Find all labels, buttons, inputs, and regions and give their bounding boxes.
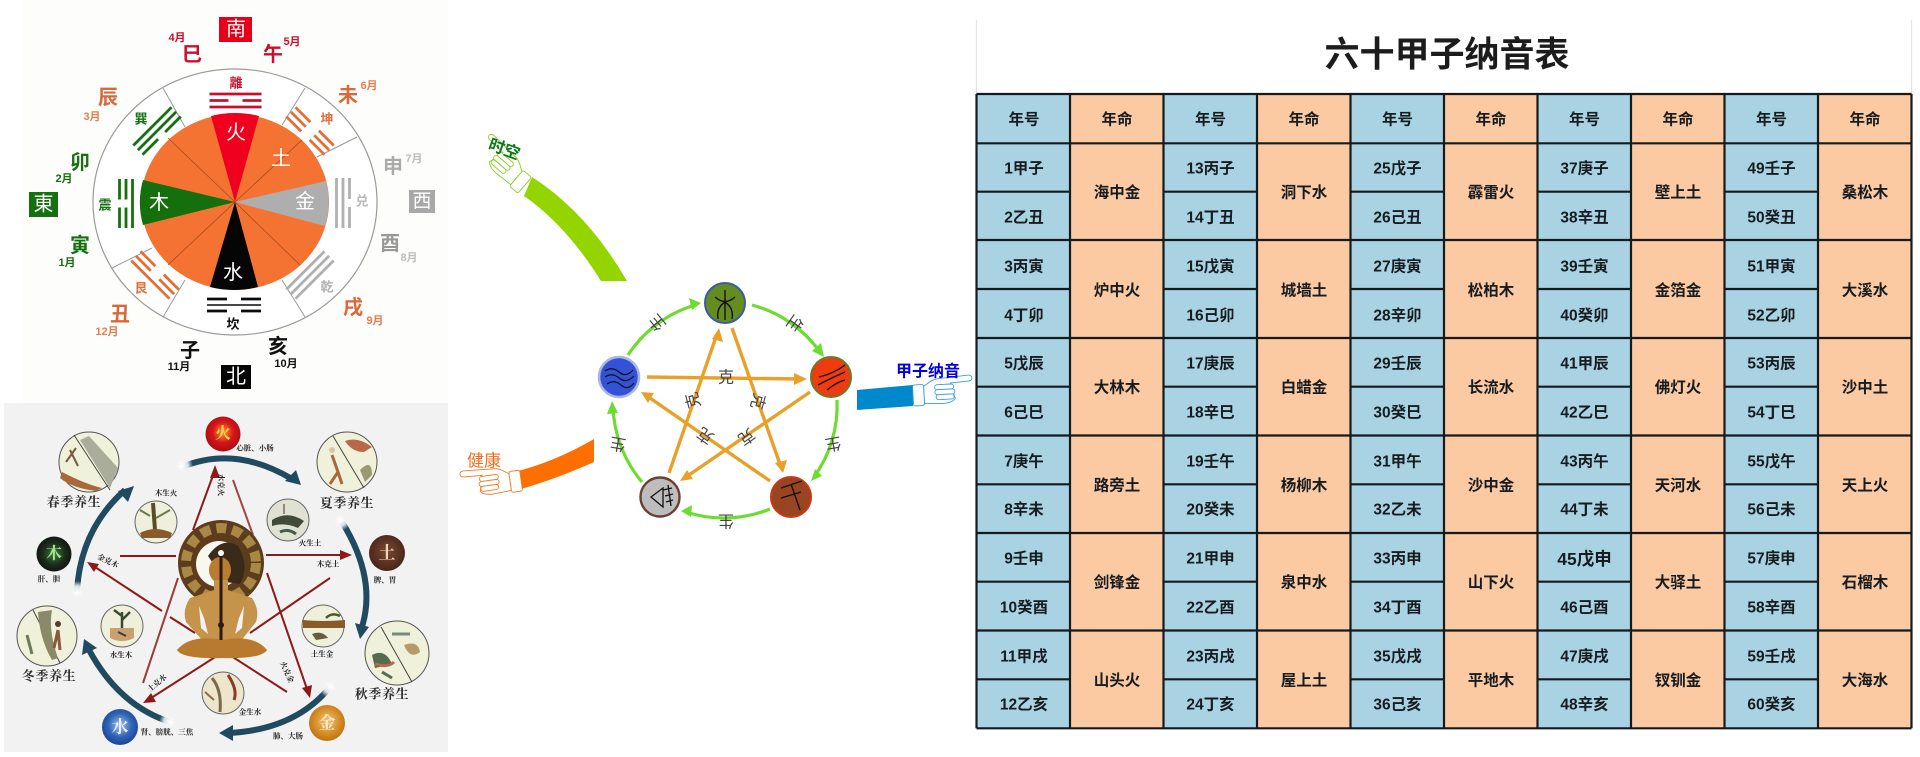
element: metal: 金 [318,712,336,732]
trigram names: 巽 [134,112,148,126]
metal circle [640,478,680,516]
column group 3: 27庚寅 [1373,256,1422,276]
column group 5: 54丁巳 [1747,404,1796,422]
sheng labels [608,310,843,530]
column group 3: 松柏木 [1468,282,1515,300]
header row: 年命 [1475,110,1507,128]
column group 4: 43丙午 [1560,452,1609,470]
column group 5: 石榴木 [1842,574,1889,592]
illustration: earth feeds metal [302,605,345,647]
column group 2: 21甲申 [1186,550,1235,568]
column group 1: 海中金 [1094,182,1141,202]
earthly branches: 寅 [70,233,90,257]
direction: west [409,190,435,213]
column group 3: 25戊子 [1373,160,1422,178]
star lines [87,465,352,703]
month labels: 5月 [283,35,301,48]
illustration: autumn [365,621,429,685]
column group 1: 炉中火 [1094,282,1141,300]
column group 2 [1186,160,1328,714]
column group 1: 5戊辰 [1004,354,1044,372]
month labels: 7月 [405,152,423,165]
month labels: 8月 [400,251,418,264]
column group 3: 34丁酉 [1373,600,1422,616]
column group 4: 金箔金 [1655,280,1702,300]
five element disc: 金 [295,190,315,213]
pointer: time and space: 时空 [486,135,523,163]
column group 5: 50癸丑 [1747,208,1796,226]
relation and organ labels: 心脏、小肠 [236,442,274,452]
column group 1: 4丁卯 [1004,306,1044,324]
header row: 年命 [1662,110,1694,128]
five element disc [140,113,329,290]
month labels: 1月 [58,256,76,269]
month labels: 12月 [95,325,119,338]
sheng labels: 生 [608,433,627,454]
relation and organ labels: 火克金 [278,659,297,685]
earthly branches: 辰 [98,87,118,109]
relation and organ labels: 水克火 [216,474,226,497]
column group 5: 53丙辰 [1747,356,1796,372]
column group 4: 钗钏金 [1655,670,1702,690]
column group 1 [1000,160,1141,714]
panel: bagua wheel [23,0,448,403]
header row [1008,110,1881,128]
column group 4: 44丁未 [1560,500,1609,518]
trigram: kan [207,299,261,311]
column group 4 [1557,158,1702,714]
column group 4: 39壬寅 [1560,256,1609,276]
trigram: qian [286,251,334,299]
column group 3: 31甲午 [1373,452,1422,470]
cycle arrows [66,455,369,741]
five element disc: 火 [226,122,246,144]
five element disc: 水 [223,261,243,284]
trigram: xun [133,107,181,155]
column group 1: 路旁土 [1094,476,1140,494]
column group 5: 沙中土 [1842,378,1888,396]
column group 2: 16己卯 [1186,306,1235,324]
element: fire [206,416,240,452]
column group 4: 38辛丑 [1560,208,1609,226]
column group 5: 大溪水 [1842,282,1889,300]
column group 2: 22乙酉 [1186,598,1235,616]
ke labels: 克 [718,368,734,386]
column group 5: 58辛酉 [1747,598,1796,616]
column group 4: 47庚戌 [1560,646,1609,666]
relation and organ labels: 水生木 [110,650,133,660]
trigram: gen [131,251,179,299]
trigram names: 兑 [355,194,369,208]
pointer: health: 健康 [467,452,501,470]
column group 5: 57庚申 [1747,548,1796,568]
sheng labels: 生 [824,433,843,454]
column group 2: 泉中水 [1281,572,1328,592]
column group 3: 36己亥 [1373,694,1422,714]
trigram: kun [286,107,334,155]
column group 1: 2乙丑 [1004,208,1044,226]
earth circle [771,477,811,517]
direction: north: 北 [226,365,246,388]
ke labels: 克 [694,423,717,447]
column group 2: 20癸未 [1186,500,1235,518]
illustration: metal feeds water [202,672,244,714]
wood circle [705,283,745,323]
earthly branches: 巳 [182,44,202,66]
column group 3: 26己丑 [1373,210,1422,226]
element: water: 水 [112,718,128,736]
column group 2: 屋上土 [1281,672,1327,690]
column group 5: 大海水 [1842,672,1889,690]
column group 4: 37庚子 [1560,158,1609,178]
column group 5: 天上火 [1842,476,1889,494]
earthly branches: 子 [180,340,200,362]
column group 5 [1747,160,1889,714]
fire circle [811,357,851,397]
element: metal [309,705,345,741]
panel: five element health cycle [4,403,448,752]
column group 3: 29壬辰 [1373,354,1422,372]
wheel ring [93,69,377,335]
column group 4: 40癸卯 [1560,306,1609,324]
header row: 年号 [1756,110,1787,128]
column group 1: 11甲戌 [1000,648,1048,666]
illustration: spring [59,432,119,492]
cell backgrounds [976,94,1912,728]
relation and organ labels: 金生水 [239,706,262,716]
element: earth [369,535,405,571]
direction: south [219,17,252,42]
month labels: 10月 [274,357,298,370]
grid lines [976,94,1912,728]
column group 1: 山头火 [1094,672,1141,690]
column group 2: 23丙戌 [1186,648,1235,666]
relation and organ labels: 肾、膀胱、三焦 [141,726,194,736]
relation and organ labels: 土生金 [311,648,334,658]
ke labels: 克 [735,424,758,448]
season labels: 秋季养生 [355,686,409,702]
relation and organ labels: 肺、大肠 [273,730,303,740]
column group 3: 28辛卯 [1373,306,1422,324]
earthly branches [70,43,403,362]
column group 4: 45戊申 [1557,549,1612,569]
month labels: 4月 [168,31,186,44]
element: water [102,709,138,745]
column group 5: 桑松木 [1842,184,1889,202]
relation and organ labels: 火生土 [299,538,322,548]
column group 3: 35戊戌 [1373,648,1422,666]
column group 5: 51甲寅 [1747,256,1796,276]
column group 3: 霹雷火 [1468,184,1515,202]
column group 1: 3丙寅 [1004,256,1044,276]
element: fire: 火 [215,426,231,442]
column group 1: 6己巳 [1004,404,1044,422]
relation and organ labels: 金克木 [96,551,121,570]
column group 2: 24丁亥 [1186,694,1235,714]
five element disc: 土 [271,147,291,170]
column group 1: 1甲子 [1004,160,1044,178]
season labels: 冬季养生 [22,668,76,684]
direction: west: 西 [412,191,432,212]
pointer: nayin: 甲子纳音 [896,362,960,380]
header row: 年命 [1849,110,1881,128]
ke labels: 克 [683,390,704,410]
column group 3: 沙中金 [1468,476,1515,494]
season labels: 春季养生 [47,494,101,510]
trigram names [98,76,369,332]
illustration: water feeds wood [101,605,143,647]
overcoming arrows [641,328,810,481]
ke labels [683,368,768,448]
month labels: 9月 [366,314,384,327]
column group 1: 10癸酉 [1000,598,1048,616]
header row: 年命 [1101,110,1133,128]
trigram: li [210,94,262,107]
column group 4: 壁上土 [1655,182,1701,202]
column group 5: 60癸亥 [1747,694,1796,714]
column group 3: 平地木 [1468,672,1515,690]
direction: east [29,192,58,217]
sheng labels: 生 [782,312,806,335]
column group 2: 15戊寅 [1186,256,1235,276]
column group 2: 白蜡金 [1281,378,1328,396]
column group 2: 19壬午 [1186,452,1235,470]
column group 4: 天河水 [1655,476,1702,494]
illustration: fire feeds earth [267,499,309,541]
season labels: 夏季养生 [320,496,374,510]
relation and organ labels [38,442,396,740]
ke labels: 克 [747,391,768,411]
column group 1: 8辛未 [1004,500,1044,518]
meditating figure [177,520,267,658]
column group 3: 33丙申 [1373,550,1422,568]
column group 2: 14丁丑 [1186,210,1235,226]
header row: 年号 [1569,110,1600,128]
trigram names: 離 [229,76,243,90]
column group 3: 长流水 [1468,378,1515,396]
element: wood: 木 [46,544,62,562]
sheng labels: 生 [718,512,734,530]
column group 1: 剑锋金 [1094,572,1141,592]
earthly branches: 未 [338,84,358,107]
water circle [599,357,639,397]
relation and organ labels: 肝、胆 [38,574,61,584]
trigram: zhen [120,179,132,228]
earthly branches: 酉 [380,233,400,255]
header row: 年命 [1288,110,1320,128]
table title: 六十甲子纳音表 [1324,36,1570,74]
header row: 年号 [1382,110,1413,128]
earthly branches: 申 [383,155,403,178]
trigram names: 震 [98,198,112,212]
five element disc: 木 [149,191,169,214]
panel: sixty jiazi nayin table [976,20,1912,728]
month labels: 6月 [360,79,378,92]
column group 1: 9壬申 [1004,550,1044,568]
earthly branches: 丑 [110,304,130,326]
direction: north [221,365,251,389]
month labels: 3月 [83,110,101,123]
column group 1: 7庚午 [1004,452,1044,470]
element: earth: 土 [378,544,396,562]
trigram names: 坎 [226,316,240,332]
column group 4: 48辛亥 [1560,694,1609,714]
relation and organ labels: 脾、胃 [374,574,396,584]
column group 2: 城墙土 [1281,280,1327,300]
column group 5: 55戊午 [1747,452,1796,470]
column group 3: 山下火 [1468,574,1515,592]
relation and organ labels: 土克水 [145,671,169,694]
illustration: summer [317,432,377,492]
illustration: wood feeds fire [135,501,177,543]
column group 4: 41甲辰 [1560,356,1609,372]
column group 2: 杨柳木 [1281,476,1328,494]
header row: 年号 [1195,110,1226,128]
hand: blue [912,375,973,406]
earthly branches: 戌 [343,296,363,319]
column group 3: 30癸巳 [1373,404,1422,422]
trigram: dui [336,178,350,228]
generating arcs [607,298,837,518]
header row: 年号 [1008,110,1040,128]
column group 5: 49壬子 [1747,160,1796,178]
month labels: 2月 [55,172,73,185]
column group 1: 大林木 [1094,378,1141,396]
column group 5: 59壬戌 [1747,648,1796,666]
pointer: health [459,439,594,499]
month labels: 11月 [168,360,190,373]
hand: green [473,133,536,193]
column group 1: 12乙亥 [1000,694,1048,714]
trigram names: 乾 [320,280,334,294]
earthly branches: 午 [263,43,283,66]
column group 4: 大驿土 [1655,574,1701,592]
direction: east: 東 [34,192,54,216]
element: wood [36,536,72,572]
pointer: time and space [473,133,627,281]
relation and organ labels: 木生火 [155,488,178,498]
column group 5: 56己未 [1747,500,1796,518]
sheng labels: 生 [646,310,670,334]
season labels [22,494,409,702]
hand: orange [459,463,523,499]
column group 2: 17庚辰 [1186,354,1235,372]
relation and organ labels: 木克土 [317,558,340,568]
earthly branches: 亥 [268,334,288,358]
column group 4: 46己酉 [1560,600,1609,616]
illustration: winter [17,606,77,666]
column group 4: 佛灯火 [1655,378,1702,396]
pointer: nayin [857,362,973,410]
trigram names: 坤 [320,112,334,126]
direction: south: 南 [226,18,246,40]
month labels [55,31,423,373]
column group 3 [1373,160,1515,714]
column group 5: 52乙卯 [1747,306,1796,324]
column group 2: 13丙子 [1186,160,1235,178]
column group 4: 42乙巳 [1560,404,1609,422]
trigram names: 艮 [134,280,148,296]
column group 3: 32乙未 [1373,500,1422,518]
earthly branches: 卯 [70,151,90,174]
panel: wuxing diagram [599,283,851,530]
column group 2: 洞下水 [1281,184,1328,202]
column group 2: 18辛巳 [1186,402,1235,422]
